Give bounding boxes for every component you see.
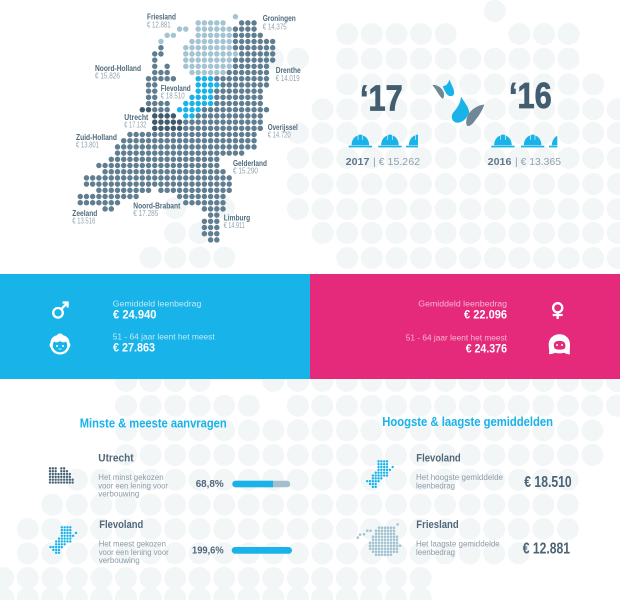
icon: butterflies	[432, 80, 484, 126]
text: women average: € 22.096	[464, 310, 507, 322]
bar: Utrecht 68,8%	[232, 481, 290, 487]
label: Zeeland	[72, 209, 97, 225]
map labels	[72, 12, 301, 230]
mini map: Friesland	[358, 524, 400, 555]
text: Flevoland most chosen: Flevoland	[99, 519, 143, 531]
text: Utrecht least chosen: voor een lening voor	[98, 481, 168, 491]
mini map: Flevoland (highest)	[367, 461, 393, 487]
label: Groningen: Groningen	[263, 14, 296, 23]
text: Flevoland most chosen	[99, 519, 169, 565]
text: women age group: 51 - 64 jaar leent het meest	[406, 332, 508, 342]
label: Zuid-Holland: Zuid-Holland	[76, 133, 117, 142]
text: Friesland lowest	[416, 519, 500, 557]
caption: 2016 amount: | € 13.365	[515, 156, 561, 168]
text: Flevoland highest: Flevoland	[416, 453, 461, 465]
region dots: Friesland	[161, 17, 235, 72]
caption: 2016 amount: 2016	[488, 156, 512, 168]
label: Groningen	[263, 14, 296, 32]
text: men average	[113, 299, 202, 322]
text: men average: € 24.940	[113, 310, 156, 322]
caption: 2017 amount: 2017	[346, 156, 370, 168]
label: Friesland	[147, 12, 176, 30]
text: Friesland lowest: Friesland	[416, 519, 459, 531]
text: women average: Gemiddeld leenbedrag	[418, 299, 507, 309]
text: Flevoland most chosen: voor een lening voor	[99, 547, 169, 557]
label: Utrecht: € 17.132	[124, 121, 146, 130]
value: € 12.881: € 12.881	[523, 541, 570, 558]
text: men average: Gemiddeld leenbedrag	[113, 299, 202, 309]
label: Overijssel	[268, 123, 298, 139]
icon: girl face	[549, 334, 570, 354]
label: Limburg: € 14.911	[224, 221, 245, 230]
text: Utrecht least chosen: verbouwing	[98, 489, 140, 499]
label: Flevoland: € 18.510	[161, 92, 185, 100]
value: € 18.510: € 18.510	[524, 474, 572, 491]
text: women age group	[406, 332, 508, 355]
label: Friesland: Friesland	[147, 12, 176, 22]
label: Flevoland	[161, 84, 191, 100]
label: Friesland: € 12.881	[147, 20, 171, 30]
label: Drenthe	[276, 66, 301, 83]
panel: men	[0, 274, 310, 379]
panel: women	[310, 274, 620, 379]
text: Utrecht least chosen: Het minst gekozen	[98, 472, 164, 482]
text: Flevoland highest: leenbedrag	[416, 481, 455, 491]
heading: highest and lowest averages: Hoogste & laagste gemiddelden	[382, 414, 553, 429]
bar: Flevoland 199,6%	[232, 547, 292, 554]
label: Overijssel: € 14.720	[268, 130, 291, 139]
label: Zuid-Holland: € 13.801	[76, 140, 99, 149]
icons: helmets 2016	[491, 134, 558, 148]
label: Gelderland: Gelderland	[233, 159, 267, 168]
label: Noord-Holland: Noord-Holland	[95, 64, 141, 73]
caption: 2017 amount: | € 15.262	[373, 156, 420, 168]
label: Flevoland: Flevoland	[161, 84, 191, 93]
label: Zeeland: € 13.516	[72, 216, 95, 225]
heading: fewest and most applications: Minste & meeste aanvragen	[80, 415, 227, 430]
label: Drenthe: € 14.019	[276, 74, 300, 83]
label: Utrecht	[124, 113, 149, 130]
icon: male symbol	[53, 302, 68, 318]
text: Utrecht least chosen	[98, 453, 168, 499]
label: Utrecht: Utrecht	[124, 113, 149, 122]
text: Flevoland most chosen: verbouwing	[99, 555, 140, 565]
label: Limburg	[224, 214, 250, 230]
region dots: Flevoland	[180, 79, 217, 116]
mini map: Utrecht	[50, 468, 73, 483]
value: 68,8%: 68,8%	[196, 478, 224, 490]
label: Noord-Brabant: € 17.285	[133, 209, 159, 218]
text: Flevoland most chosen: Het meest gekozen	[99, 538, 166, 548]
text: men age group: € 27.863	[113, 343, 155, 355]
text: men age group: 51 - 64 jaar leent het meest	[113, 332, 215, 342]
label: Zuid-Holland	[76, 133, 117, 149]
label: Drenthe: Drenthe	[276, 66, 301, 75]
label: Noord-Holland: € 15.826	[95, 72, 120, 80]
label: Noord-Holland	[95, 64, 141, 80]
text: women age group: € 24.376	[466, 343, 507, 355]
value: 199,6%: 199,6%	[192, 544, 224, 556]
text: Flevoland highest	[416, 453, 503, 491]
text: Flevoland highest: Het hoogste gemiddelde	[416, 472, 503, 482]
label: Groningen: € 14.375	[263, 22, 287, 32]
label: Noord-Brabant	[133, 202, 181, 218]
text: women average	[418, 299, 507, 322]
icon: female symbol	[553, 303, 563, 319]
caption: 2016 amount	[488, 156, 561, 168]
label: Overijssel: Overijssel	[268, 123, 298, 132]
map: Netherlands dot map	[80, 17, 273, 240]
region dots: Utrecht	[142, 110, 180, 128]
year heading: 2016: ‘16	[509, 75, 552, 116]
icon: boy face	[50, 334, 70, 354]
label: Noord-Brabant: Noord-Brabant	[133, 202, 181, 211]
caption: 2017 amount	[346, 156, 420, 168]
mini map: Flevoland (least/most)	[50, 527, 76, 553]
label: Limburg: Limburg	[224, 214, 250, 223]
text: men age group	[113, 332, 215, 355]
text: Friesland lowest: Het laagste gemiddelde	[416, 538, 500, 548]
label: Gelderland	[233, 159, 267, 175]
region dots: main provinces	[80, 23, 273, 240]
label: Gelderland: € 15.290	[233, 166, 259, 175]
icons: helmets 2017	[348, 134, 418, 148]
year heading: 2017: ‘17	[360, 77, 403, 118]
text: Utrecht least chosen: Utrecht	[98, 453, 134, 465]
text: Friesland lowest: leenbedrag	[416, 547, 455, 557]
label: Zeeland: Zeeland	[72, 209, 97, 218]
